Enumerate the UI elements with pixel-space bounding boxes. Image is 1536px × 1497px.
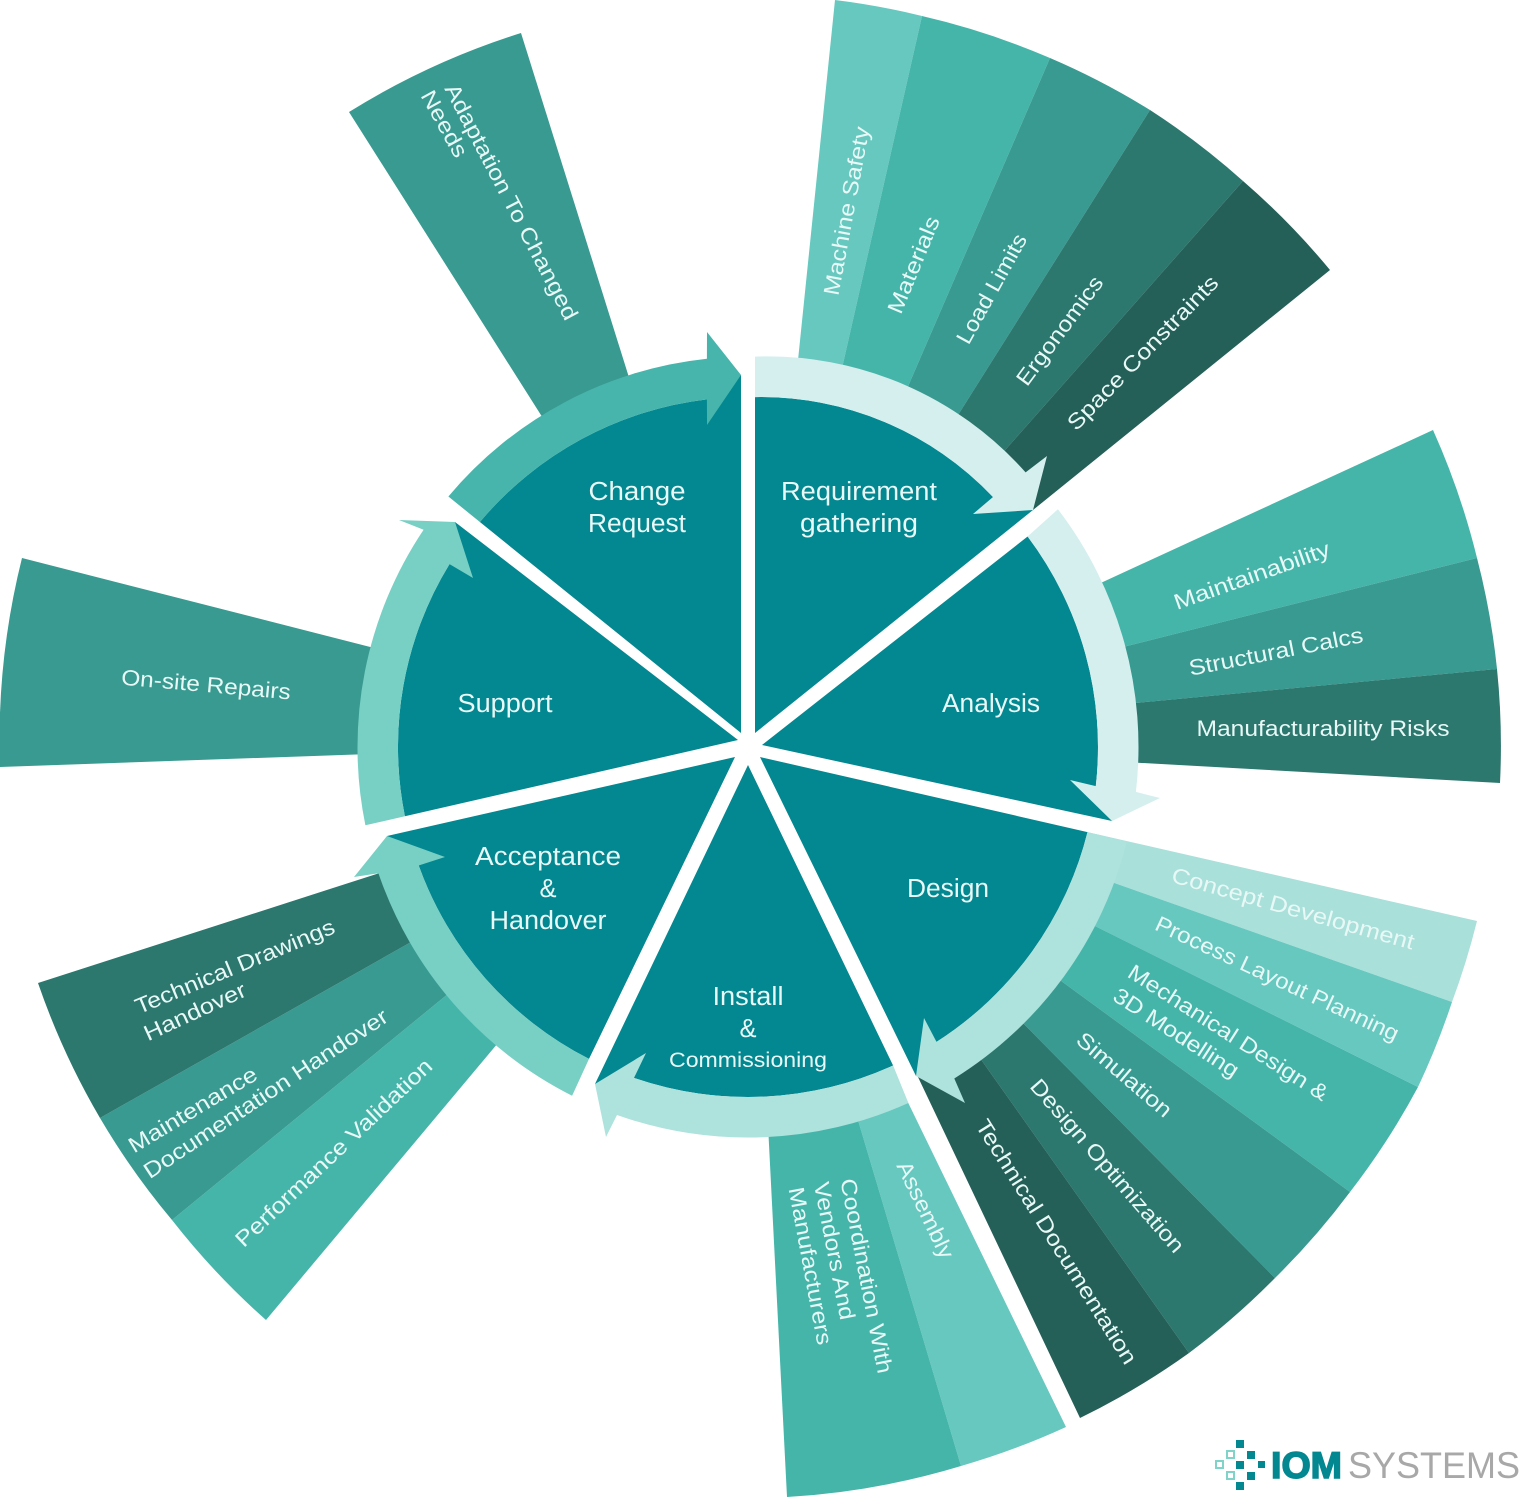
petal: Concept Development bbox=[1087, 832, 1477, 1002]
petal: Simulation: Simulation bbox=[1071, 1027, 1177, 1122]
ring of process arrows bbox=[354, 332, 1160, 1138]
sector: Acceptance and Handover: & bbox=[540, 875, 556, 903]
sector: Support bbox=[398, 522, 738, 816]
sector: Change Request: Change bbox=[588, 478, 686, 506]
panel: install and commissioning details bbox=[768, 1086, 1066, 1497]
arrow: Install and Commissioning bbox=[595, 1053, 908, 1138]
petal: Mechanical Design and 3D Modelling: Mechanical Design & bbox=[1123, 959, 1333, 1106]
petal: Technical Documentation: Technical Documentation bbox=[971, 1115, 1142, 1369]
petal: Materials bbox=[840, 16, 1050, 398]
wordmark bbox=[1271, 1445, 1520, 1486]
petal: Performance Validation: Performance Validation bbox=[230, 1053, 437, 1252]
petal: Ergonomics: Ergonomics bbox=[1011, 271, 1108, 390]
petal: Technical Documentation bbox=[918, 1051, 1189, 1418]
sector: Change Request: Request bbox=[588, 510, 686, 538]
wordmark: IOM bbox=[1271, 1445, 1342, 1486]
sector: Design bbox=[760, 757, 1088, 1076]
arrow: Change Request bbox=[448, 332, 741, 522]
petal: Concept Development: Concept Development bbox=[1169, 863, 1417, 955]
petal: Coordination With Vendors And Manufacturers: Coordination With bbox=[835, 1176, 898, 1375]
petal: Process Layout Planning: Process Layout Planning bbox=[1151, 911, 1403, 1046]
petal: Ergonomics bbox=[953, 110, 1243, 457]
petal: Mechanical Design and 3D Modelling: 3D Modelling bbox=[1109, 983, 1244, 1083]
logo: IOM Systems bbox=[1216, 1440, 1520, 1490]
sector: Analysis: Analysis bbox=[942, 690, 1040, 718]
arrow: Support bbox=[357, 520, 473, 825]
petal: Process Layout Planning bbox=[1087, 879, 1452, 1087]
petal: Adaptation To Changed Needs: Needs bbox=[416, 86, 473, 162]
petal: Maintainability: Maintainability bbox=[1170, 536, 1333, 615]
petal: Coordination With Vendors And Manufacturers bbox=[768, 1110, 961, 1497]
sector: Requirement gathering: Requirement bbox=[781, 478, 937, 506]
panel: design details bbox=[918, 832, 1477, 1418]
petal: Design Optimization: Design Optimization bbox=[1025, 1074, 1190, 1258]
panel: support details bbox=[0, 558, 382, 767]
petal: Assembly: Assembly bbox=[892, 1157, 959, 1263]
sector: Install and Commissioning bbox=[595, 765, 893, 1097]
petal: Machine Safety: Machine Safety bbox=[819, 125, 874, 297]
petal: Structural Calcs: Structural Calcs bbox=[1187, 622, 1365, 681]
sector: Acceptance and Handover bbox=[387, 757, 735, 1059]
sector: Support: Support bbox=[458, 690, 552, 718]
sector: Design: Design bbox=[907, 875, 989, 903]
petal: Maintainability bbox=[1092, 430, 1477, 649]
petal: Coordination With Vendors And Manufacturers: Manufacturers bbox=[784, 1185, 837, 1347]
panel: acceptance and handover details bbox=[38, 869, 503, 1320]
petal: Design Optimization bbox=[975, 1017, 1275, 1353]
petal: Adaptation To Changed Needs: Adaptation To Changed bbox=[440, 79, 583, 324]
sector: Acceptance and Handover: Handover bbox=[490, 907, 607, 935]
petal: Maintenance Documentation Handover: Maintenance bbox=[124, 1061, 262, 1158]
sector: Requirement gathering bbox=[755, 397, 1033, 733]
petal: Maintenance Documentation Handover: Documentation Handover bbox=[139, 1004, 393, 1183]
petal: Technical Drawings Handover: Technical Drawings bbox=[131, 914, 338, 1019]
wordmark: SYSTEMS bbox=[1348, 1445, 1520, 1486]
petal: Simulation bbox=[1017, 975, 1350, 1278]
petal: Space Constraints: Space Constraints bbox=[1062, 270, 1223, 435]
petal: Adaptation To Changed Needs bbox=[349, 33, 632, 423]
petal: Mechanical Design and 3D Modelling bbox=[1053, 922, 1418, 1192]
petal: On-site Repairs bbox=[0, 558, 382, 767]
petal: Maintenance Documentation Handover bbox=[100, 937, 454, 1220]
sector: Analysis bbox=[762, 536, 1112, 821]
petal: Load Limits: Load Limits bbox=[951, 229, 1032, 348]
arrow: Design bbox=[916, 832, 1127, 1103]
sector: Requirement gathering: gathering bbox=[800, 510, 918, 538]
petal: Materials: Materials bbox=[882, 212, 945, 317]
petal: Space Constraints bbox=[999, 181, 1330, 510]
arrow: Requirement gathering bbox=[755, 356, 1047, 514]
petal: On-site Repairs: On-site Repairs bbox=[120, 665, 292, 704]
sector: Change Request bbox=[480, 375, 741, 733]
sector: Acceptance and Handover: Acceptance bbox=[475, 843, 621, 871]
petal: Coordination With Vendors And Manufacturers: Vendors And bbox=[809, 1180, 860, 1322]
petal: Structural Calcs bbox=[1115, 558, 1497, 704]
petal: Performance Validation bbox=[172, 989, 503, 1320]
panel: requirement gathering details bbox=[797, 0, 1330, 510]
petal: Assembly bbox=[855, 1086, 1066, 1466]
sector: Install and Commissioning: Install bbox=[712, 983, 784, 1011]
petal: Technical Drawings Handover: Handover bbox=[140, 977, 250, 1046]
petal: Manufacturability Risks bbox=[1125, 669, 1501, 783]
sector: Install and Commissioning: Commissioning bbox=[669, 1048, 827, 1072]
petal: Manufacturability Risks: Manufacturability Risks bbox=[1196, 716, 1450, 741]
panel: change request details bbox=[349, 33, 632, 423]
petal: Machine Safety bbox=[797, 0, 922, 377]
wheel bbox=[387, 375, 1112, 1097]
sector: Install and Commissioning: & bbox=[740, 1015, 756, 1043]
arrow: Analysis bbox=[1028, 509, 1160, 821]
panel: analysis details bbox=[1092, 430, 1501, 783]
petal: Load Limits bbox=[903, 58, 1150, 423]
petal: Technical Drawings Handover bbox=[38, 869, 420, 1118]
icon: pixel mark bbox=[1216, 1440, 1265, 1490]
arrow: Acceptance and Handover bbox=[354, 836, 589, 1096]
